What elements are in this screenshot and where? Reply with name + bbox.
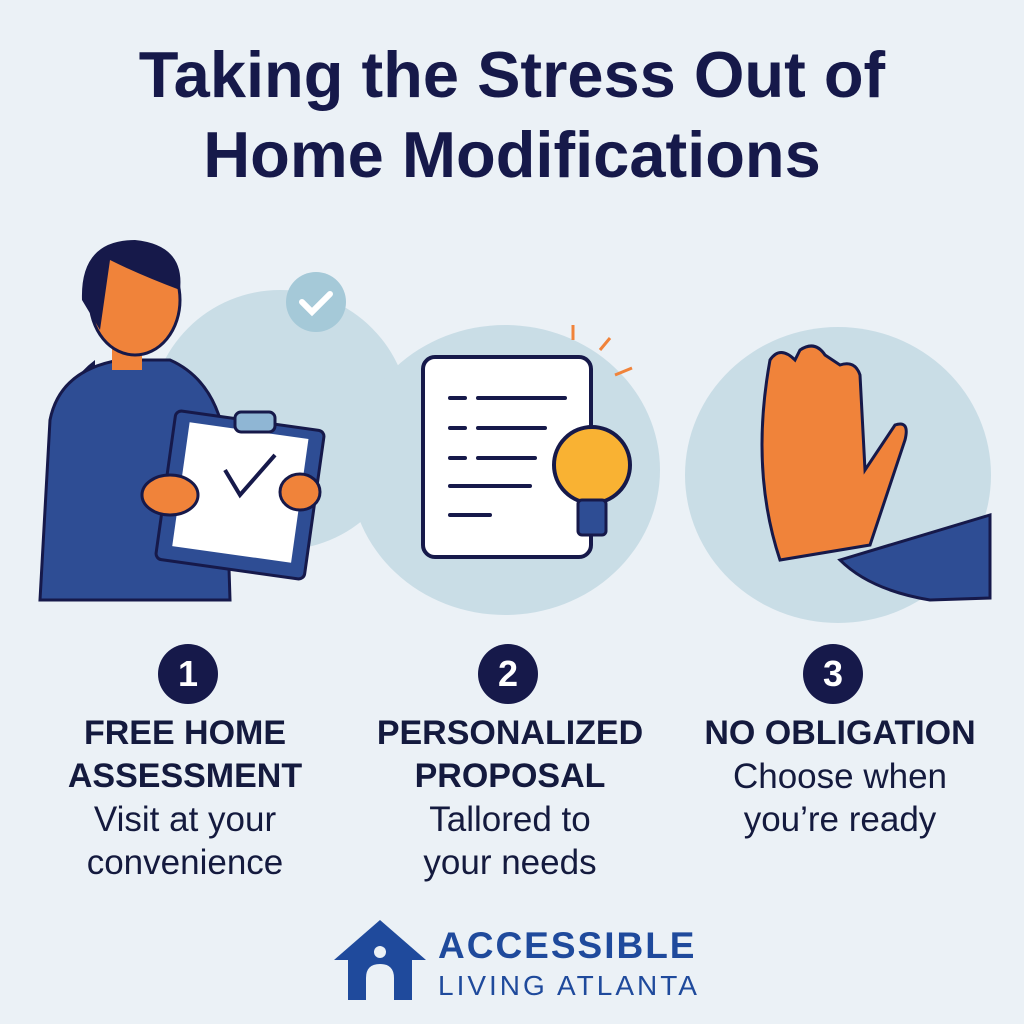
step 3 number [803, 644, 863, 704]
step 1 number [158, 644, 218, 704]
text: step 2: PERSONALIZED [377, 714, 643, 752]
text: step 1: ASSESSMENT [68, 757, 302, 795]
panel: assessment illustration [40, 240, 410, 600]
panel: stop hand illustration [685, 327, 991, 623]
step 1 number: 1 [178, 653, 198, 694]
title: Home Modifications [203, 118, 821, 191]
step 3 number: 3 [823, 653, 843, 694]
illustrations [38, 240, 992, 623]
logo text: ACCESSIBLE [438, 925, 696, 966]
text: step 3: NO OBLIGATION [704, 714, 976, 752]
text: step 2 [377, 714, 643, 882]
icon: house [334, 920, 426, 1000]
panel: proposal illustration [350, 325, 660, 615]
step 2 number [478, 644, 538, 704]
title [139, 38, 886, 191]
text: step 1: FREE HOME [84, 714, 286, 752]
title: Taking the Stress Out of [139, 38, 885, 111]
text: step 1: Visit at your [94, 800, 276, 839]
text: step 2: Tallored to [429, 800, 591, 839]
text: step 3: Choose when [733, 757, 947, 796]
text: step 3: you’re ready [744, 800, 936, 839]
logo [334, 920, 700, 1001]
logo: LIVING ATLANTA [438, 970, 700, 1001]
text: step 2: PROPOSAL [415, 757, 605, 795]
text: step 3 [704, 714, 976, 839]
text: step 1 [68, 714, 302, 882]
text: step 1: convenience [87, 843, 283, 882]
step 2 number: 2 [498, 653, 518, 694]
text: step 2: your needs [423, 843, 597, 882]
